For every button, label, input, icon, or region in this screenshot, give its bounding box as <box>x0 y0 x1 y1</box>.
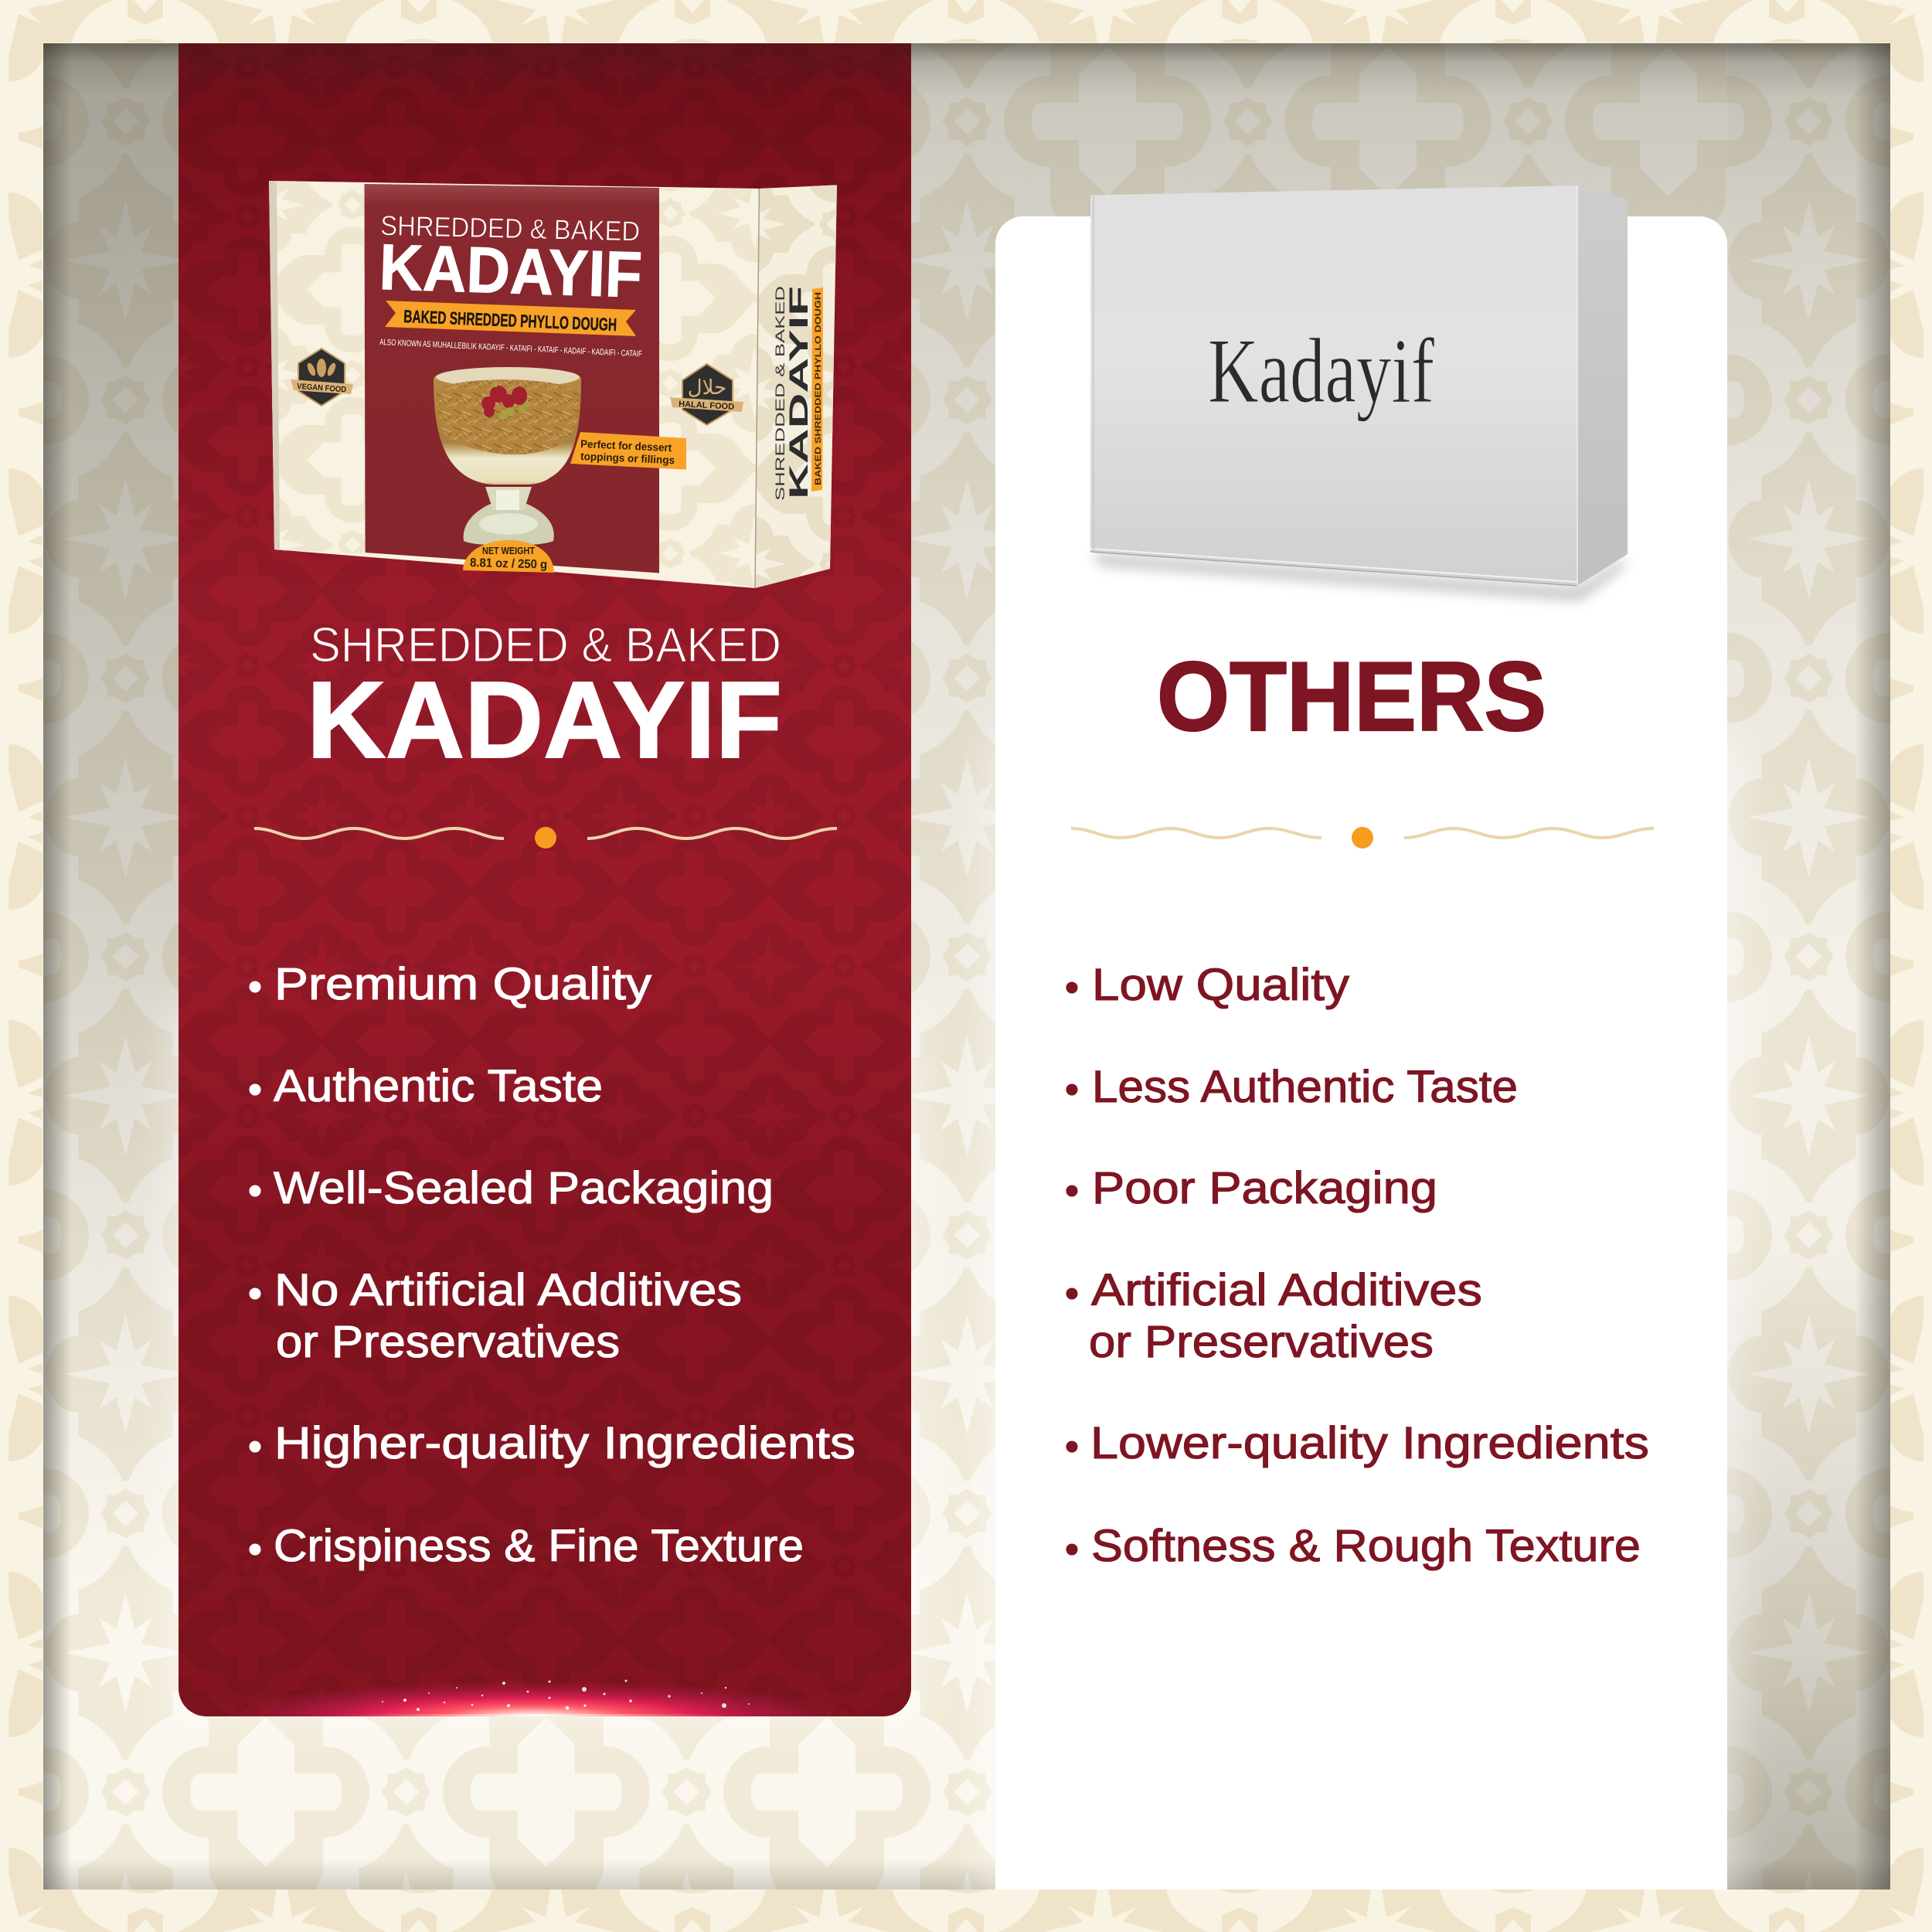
list: kadayif benefits: Higher-quality Ingredients <box>274 1418 855 1468</box>
box shadow <box>1094 553 1626 601</box>
list: others drawbacks: Poor Packaging <box>1092 1163 1437 1213</box>
list: kadayif benefits: Well-Sealed Packaging <box>274 1163 774 1213</box>
bottom light flare <box>250 1680 823 1716</box>
box side face: BAKED SHREDDED PHYLLO DOUGH <box>814 292 823 485</box>
list: others drawbacks: Low Quality <box>1092 960 1349 1010</box>
panel: others <box>995 185 1727 1889</box>
badge: halal food: HALAL FOOD <box>679 400 734 412</box>
box red band <box>365 184 659 573</box>
net weight badge: 8.81 oz / 250 g <box>470 556 547 572</box>
list: kadayif benefits: Authentic Taste <box>274 1061 603 1111</box>
box heading: KADAYIF <box>378 230 643 311</box>
list: others drawbacks: Lower-quality Ingredients <box>1090 1418 1649 1468</box>
side text: SHREDDED & BAKED <box>773 286 787 501</box>
heading: shredded and baked kadayif: KADAYIF <box>307 658 782 781</box>
net weight badge <box>463 540 554 573</box>
product box: kadayif package <box>269 181 837 588</box>
box side face <box>755 185 837 588</box>
badge: halal food <box>670 364 743 425</box>
side band <box>811 287 823 492</box>
box subtitle: ALSO KNOWN AS MUHALLEBILIK KADAYIF - KATAIFI - KATAIF - KADAIF - KADAIFI - CATAIF <box>379 338 642 359</box>
list: others drawbacks: or Preservatives <box>1089 1317 1434 1367</box>
box front face <box>269 181 759 588</box>
list: kadayif benefits: No Artificial Additives <box>274 1265 742 1315</box>
dessert glass <box>434 367 581 546</box>
divider: wave and dot <box>1071 827 1654 849</box>
callout: dessert toppings: Perfect for dessert <box>580 437 672 454</box>
heading: others: OTHERS <box>1157 641 1546 751</box>
box label: Kadayif <box>1208 319 1434 422</box>
box ribbon: BAKED SHREDDED PHYLLO DOUGH <box>403 306 617 335</box>
badge: vegan food <box>291 349 353 406</box>
heading: shredded and baked kadayif: SHREDDED & BAKED <box>310 618 781 672</box>
badge: vegan food: VEGAN FOOD <box>297 382 347 394</box>
box front <box>1090 185 1577 586</box>
list: kadayif benefits: Crispiness & Fine Texture <box>274 1521 804 1571</box>
product box: plain grey package <box>1090 185 1628 601</box>
list: kadayif benefits: or Preservatives <box>276 1317 620 1367</box>
panel: shredded and baked kadayif <box>179 43 911 1752</box>
callout: dessert toppings: toppings or fillings <box>580 450 675 466</box>
list: others drawbacks: Less Authentic Taste <box>1092 1062 1518 1112</box>
box side face: KADAYIF <box>784 286 814 499</box>
soft white glow around panels <box>166 734 1740 1909</box>
list: others drawbacks <box>1066 960 1649 1571</box>
box heading: SHREDDED & BAKED <box>380 209 641 247</box>
divider: wave and dot <box>254 827 837 849</box>
box side <box>1577 185 1628 586</box>
box ribbon <box>385 301 636 336</box>
net weight badge: NET WEIGHT <box>482 546 535 556</box>
callout: dessert toppings <box>570 432 686 470</box>
list: kadayif benefits: Premium Quality <box>274 959 651 1009</box>
list: others drawbacks: Artificial Additives <box>1091 1265 1482 1315</box>
list: others drawbacks: Softness & Rough Texture <box>1091 1521 1641 1571</box>
badge: halal food: حلال <box>688 376 726 400</box>
list: kadayif benefits <box>250 959 855 1571</box>
